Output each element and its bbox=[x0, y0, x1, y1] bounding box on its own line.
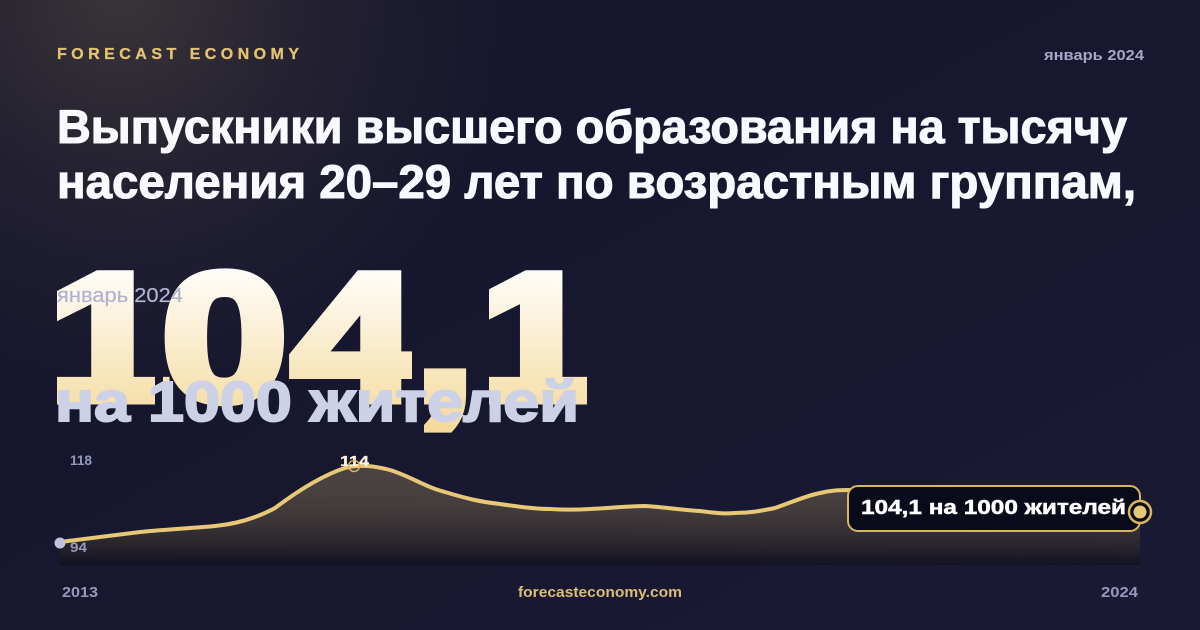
x axis start year: 2013 bbox=[62, 584, 98, 601]
date top right: январь 2024 bbox=[1044, 47, 1145, 64]
big number: 104,1 bbox=[44, 236, 599, 439]
date subtitle: январь 2024 bbox=[57, 284, 183, 307]
callout: 104,1 на 1000 жителей bbox=[861, 496, 1126, 519]
x axis end year: 2024 bbox=[1101, 584, 1139, 601]
title bbox=[57, 100, 1136, 208]
peak label: 114 bbox=[340, 453, 370, 470]
title: населения 20–29 лет по возрастным группам, bbox=[57, 155, 1136, 208]
peak marker bbox=[348, 460, 360, 472]
end marker bbox=[1129, 501, 1151, 523]
brand label: FORECAST ECONOMY bbox=[57, 46, 299, 63]
title: Выпускники высшего образования на тысячу bbox=[57, 100, 1127, 153]
source url: forecasteconomy.com bbox=[518, 585, 682, 601]
axis min label: 94 bbox=[70, 539, 87, 555]
chart line bbox=[60, 466, 850, 542]
axis max label: 118 bbox=[70, 452, 92, 468]
chart area fill bbox=[60, 466, 1140, 565]
unit label: на 1000 жителей bbox=[55, 370, 579, 434]
area chart bbox=[54, 452, 1151, 565]
callout bbox=[848, 486, 1140, 531]
start point bbox=[54, 538, 66, 548]
